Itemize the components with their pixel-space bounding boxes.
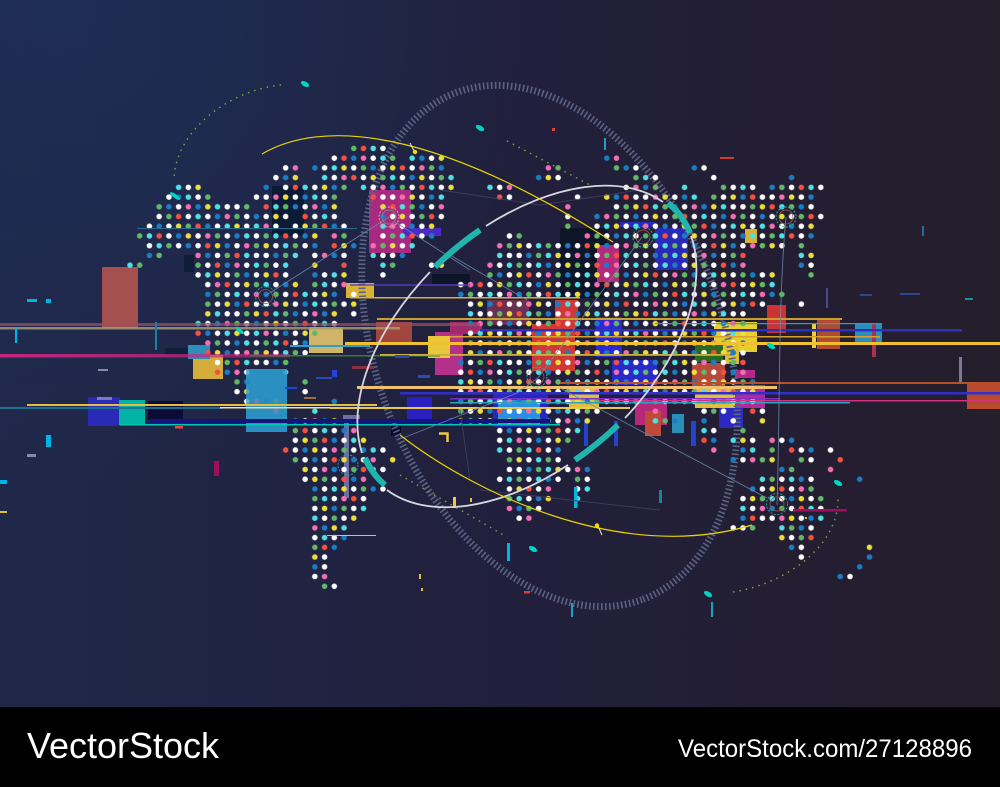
pin: lower xyxy=(595,523,602,535)
thin network lines xyxy=(265,190,786,510)
bracket: gold corner xyxy=(439,434,448,442)
pin: upper xyxy=(410,143,417,154)
block: magenta greenland xyxy=(369,190,411,253)
reticle: south america xyxy=(338,455,358,475)
lines: central gold bands xyxy=(330,284,1000,409)
yellow orbit arcs xyxy=(262,136,752,536)
footer bar xyxy=(0,707,1000,787)
hatched orbit ring xyxy=(294,33,805,659)
bars: small glitch marks xyxy=(0,128,973,617)
block: left red xyxy=(102,267,138,328)
reticle: greenland xyxy=(379,207,399,227)
panel: glitch lines xyxy=(0,128,1000,617)
block: big blue xyxy=(246,369,287,432)
icons: target reticles xyxy=(256,207,796,514)
block: europe and asia xyxy=(487,222,786,427)
block: gold group left xyxy=(188,283,412,379)
icons: teal ellipse markers xyxy=(169,80,843,598)
reticle: russia xyxy=(633,227,653,247)
panel: translucent blocks behind map xyxy=(88,186,1000,498)
reticle: far east xyxy=(776,207,796,227)
dotted world map xyxy=(125,144,874,591)
reticle: africa xyxy=(527,367,547,387)
reticle: australia xyxy=(766,494,788,514)
block: east asia xyxy=(584,322,765,446)
dotted green arcs xyxy=(174,85,838,592)
translucent overlay: big blue block over dots xyxy=(246,369,287,432)
block: indigo teal navy row xyxy=(88,397,183,426)
reticle: north america xyxy=(256,286,276,306)
block: central atlantic xyxy=(343,322,482,498)
teal orbit segments xyxy=(365,203,690,485)
block: north america dark xyxy=(272,186,304,236)
white orbit ring xyxy=(357,186,696,507)
footer url text: VectorStock.com/27128896 xyxy=(678,735,972,763)
footer logo text: VectorStock xyxy=(27,725,220,766)
block: right side xyxy=(812,320,1000,409)
lines: left streaks xyxy=(0,228,560,426)
